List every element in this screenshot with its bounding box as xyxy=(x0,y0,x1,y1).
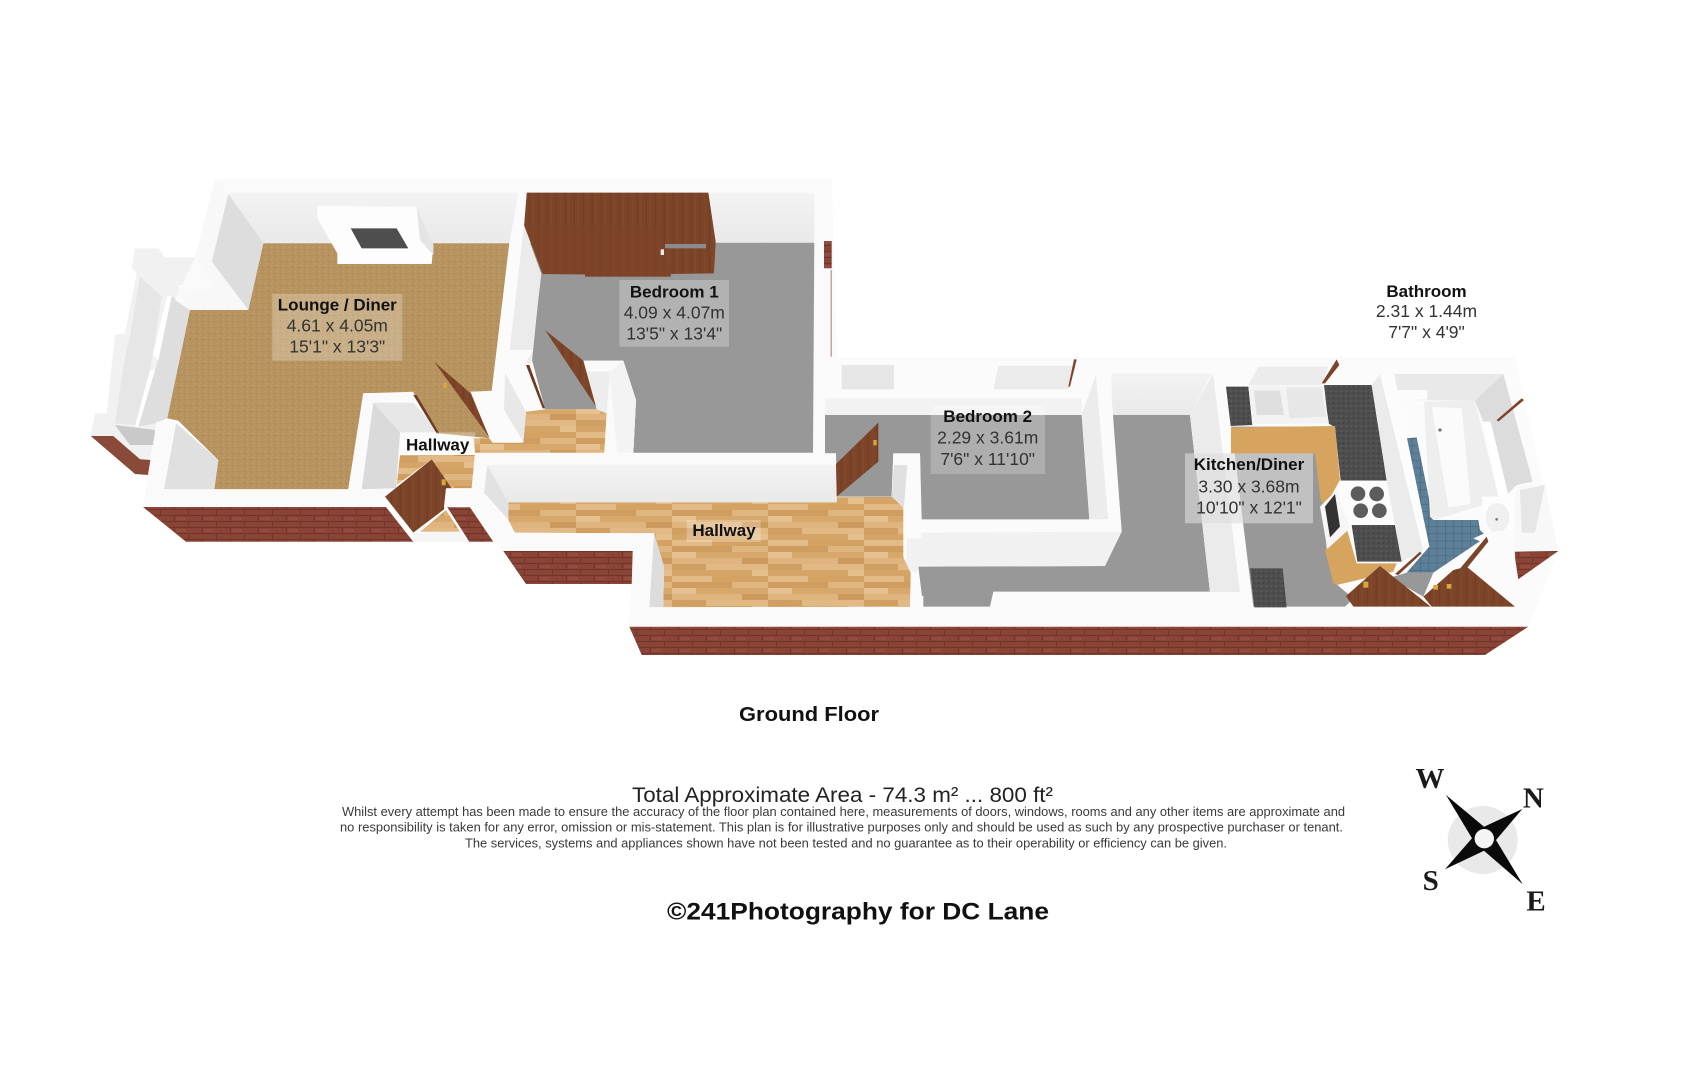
worktops xyxy=(1226,385,1402,607)
kitchen divider face xyxy=(1190,374,1240,592)
label: bedroom 1: 4.09 x 4.07m xyxy=(624,302,725,322)
bathroom door xyxy=(1423,567,1515,607)
disclaimer: Whilst every attempt has been made to ensure the accuracy of the floor plan contained here, measurements of doors, windows, rooms and any other items are approximate and xyxy=(342,805,1345,819)
corridor floor xyxy=(918,415,1210,607)
lounge brick xyxy=(143,507,413,542)
label: kitchen: 3.30 x 3.68m xyxy=(1198,477,1300,497)
label: hallway: Hallway xyxy=(692,521,756,540)
hall block face xyxy=(504,373,526,442)
total area: Total Approximate Area - 74.3 m² ... 800 ft² xyxy=(632,784,1053,807)
partition lower face xyxy=(906,532,1122,573)
wall face xyxy=(508,226,541,363)
porch brick xyxy=(447,507,493,542)
label: bedroom 2: 2.29 x 3.61m xyxy=(937,427,1038,447)
kitchen-bath wall top xyxy=(1380,374,1429,551)
corridor back face xyxy=(1112,373,1212,415)
door and block details xyxy=(385,330,636,533)
lounge carpet xyxy=(167,243,509,489)
east wing wall base xyxy=(650,357,1558,627)
label: bedroom 1: Bedroom 1 xyxy=(630,282,719,301)
bedroom 2 back face xyxy=(825,398,1082,415)
kitchen divider xyxy=(1190,374,1253,607)
bedroom 2 door xyxy=(836,423,878,497)
lounge west face xyxy=(212,194,263,310)
compass: S xyxy=(1423,865,1439,897)
disclaimer xyxy=(340,805,1345,851)
wardrobe xyxy=(524,193,716,277)
central wall top and south wall top xyxy=(444,453,1528,627)
stub wall xyxy=(892,453,922,538)
label: kitchen: 10'10" x 12'1" xyxy=(1196,497,1302,517)
label: lounge: 4.61 x 4.05m xyxy=(287,316,388,336)
wash basin xyxy=(1482,497,1515,532)
porch wood xyxy=(420,510,460,532)
bathroom right wall xyxy=(1475,374,1533,495)
front door xyxy=(385,459,452,533)
kitchen window xyxy=(1322,359,1339,383)
fireplace xyxy=(317,206,433,264)
hall brick xyxy=(503,551,633,584)
bay window xyxy=(91,248,215,460)
cooker xyxy=(1320,481,1395,549)
partition face xyxy=(1082,375,1108,519)
label: bathroom: 2.31 x 1.44m xyxy=(1376,301,1477,321)
east brick sliver xyxy=(824,241,832,268)
hall lower face xyxy=(649,533,664,607)
label: lounge: Lounge / Diner xyxy=(278,296,397,315)
west wing details xyxy=(180,179,438,488)
central wall side face xyxy=(484,465,508,520)
kitchen door xyxy=(1346,566,1431,607)
kitchen floor xyxy=(1231,427,1353,607)
compass: E xyxy=(1526,886,1546,918)
bath gray floor xyxy=(1393,573,1433,597)
label: bedroom 2 xyxy=(931,405,1045,474)
closet left face xyxy=(362,403,400,489)
label: bedroom 2: 7'6" x 11'10" xyxy=(940,449,1035,469)
door slivers xyxy=(1395,552,1422,575)
closet inner xyxy=(584,372,610,413)
lounge door xyxy=(434,362,489,437)
toilet xyxy=(1395,390,1427,437)
disclaimer: The services, systems and appliances shown have not been tested and no guarantee as to their operability or efficiency can be given. xyxy=(465,837,1227,851)
bath tub xyxy=(1424,401,1498,520)
bath wall piece xyxy=(1473,530,1518,607)
central wall end xyxy=(810,464,836,497)
hall block xyxy=(471,350,545,442)
kitchen-bath wall face xyxy=(1372,374,1423,562)
bedroom 2 floor xyxy=(825,415,1089,519)
label: bedroom 1: 13'5" x 13'4" xyxy=(626,323,722,343)
closet faces xyxy=(362,402,438,488)
label: bathroom xyxy=(1376,282,1477,342)
bathroom floor tile xyxy=(1406,437,1487,573)
lounge south walls xyxy=(143,392,416,507)
bay brick base xyxy=(91,436,151,475)
porch white xyxy=(413,532,469,542)
label: bedroom 2: Bedroom 2 xyxy=(943,407,1032,426)
partition top xyxy=(1096,375,1122,532)
back wall face xyxy=(228,193,814,243)
bedroom wardrobe and walls xyxy=(493,193,832,387)
compass: W xyxy=(1416,763,1444,795)
compass: N xyxy=(1523,783,1544,815)
bathroom back wall xyxy=(1394,374,1503,401)
kitchen cabinets xyxy=(1231,426,1397,585)
label: bedroom 1 xyxy=(619,280,729,347)
right bump wall xyxy=(1513,485,1558,551)
bathroom window xyxy=(1483,422,1508,495)
compass xyxy=(1416,763,1546,918)
west wall top xyxy=(180,179,248,310)
central wall face xyxy=(487,465,836,502)
label: kitchen: Kitchen/Diner xyxy=(1194,455,1305,474)
label: lounge: 15'1" x 13'3" xyxy=(289,336,385,356)
bedroom door xyxy=(545,330,596,407)
bedroom 2 windows xyxy=(842,359,1077,389)
kitchen back wall xyxy=(1248,367,1328,385)
label: hallway entrance: Hallway xyxy=(406,436,470,455)
label: kitchen xyxy=(1185,453,1313,523)
label: bathroom: 7'7" x 4'9" xyxy=(1388,322,1465,342)
bedroom 1 floor xyxy=(520,243,814,453)
bedroom 2 and corridor xyxy=(810,359,1233,607)
lounge west lower face xyxy=(164,423,218,489)
south brick xyxy=(629,627,1528,655)
closet wall right xyxy=(583,361,636,453)
partition lower top xyxy=(922,520,1122,533)
hallway wood floor xyxy=(508,497,911,607)
wall between lounge and bedroom xyxy=(493,193,527,387)
heading: ground floor: Ground Floor xyxy=(739,703,879,726)
floor plan xyxy=(91,179,1558,655)
sink xyxy=(1248,386,1329,424)
small hallway wood xyxy=(473,409,607,453)
label: lounge xyxy=(272,294,402,361)
bath brick xyxy=(1514,551,1558,579)
copyright: ©241Photography for DC Lane xyxy=(667,898,1049,925)
west wing wall base xyxy=(175,179,840,453)
corridor south wall xyxy=(991,593,1233,607)
kitchen and bathroom xyxy=(1226,359,1558,607)
entrance wood xyxy=(397,455,475,488)
label: bathroom: Bathroom xyxy=(1386,282,1467,301)
disclaimer: no responsibility is taken for any error, omission or mis-statement. This plan is for illustrative purposes only and should be used as such by any prospective purchaser or tenant. xyxy=(340,820,1343,834)
